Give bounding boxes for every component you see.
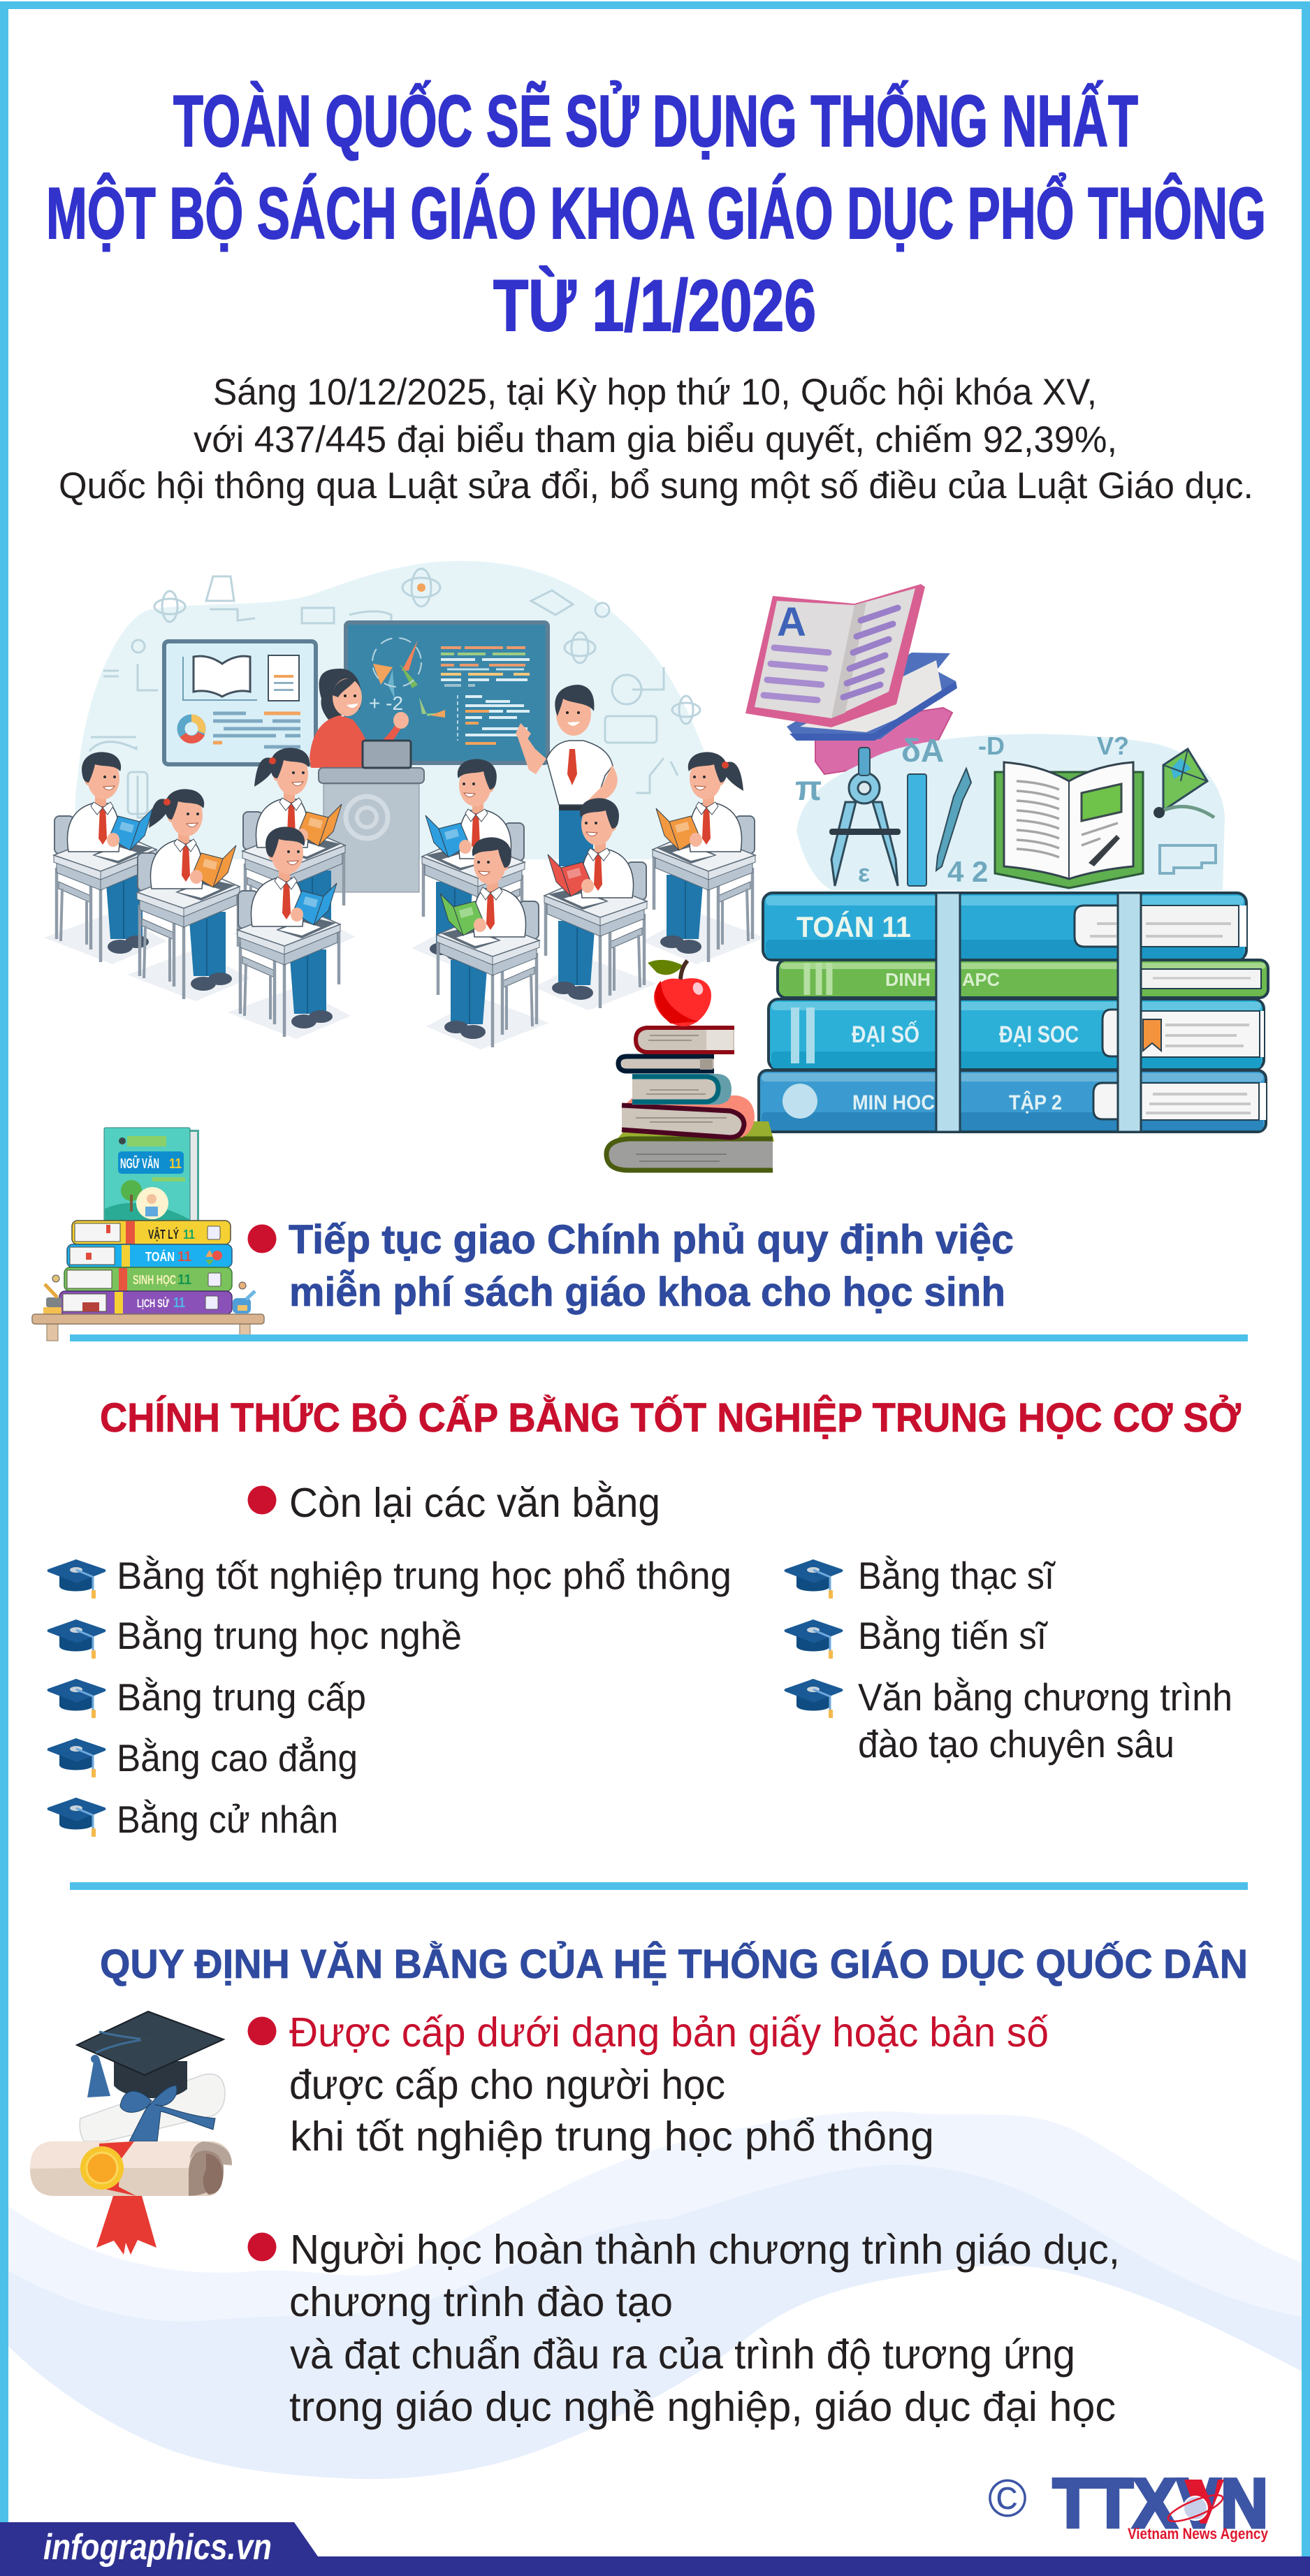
- book: Đại số: ĐẠI SỐ: [852, 1021, 919, 1048]
- teacher: man: [516, 685, 618, 866]
- item: specialised training: Văn bằng chương trình: [858, 1675, 1232, 1719]
- website: infographics.vn: [43, 2527, 272, 2568]
- book: Toán 11 small: 11: [177, 1249, 191, 1265]
- completion requirement text: trong giáo dục nghề nghiệp, giáo dục đại học: [289, 2384, 1116, 2430]
- doodle note: [1160, 845, 1216, 873]
- math symbols: 4 2: [947, 855, 988, 888]
- math symbols: ε: [858, 859, 870, 887]
- illustration: classroom: [44, 561, 765, 1049]
- completion requirement text: Người học hoàn thành chương trình giáo dục,: [290, 2227, 1120, 2273]
- student: front right boy: [426, 837, 549, 1049]
- completion requirement text: và đạt chuẩn đầu ra của trình độ tương ứng: [290, 2331, 1075, 2378]
- section: free textbooks: [247, 1217, 1014, 1315]
- student: back right boy: [412, 759, 534, 971]
- screen: textbook and chart: [164, 641, 316, 764]
- apple: [648, 960, 711, 1026]
- item: upper secondary: Bằng tốt nghiệp trung học phổ thông: [117, 1554, 732, 1597]
- book: Sinh học 11: [64, 1267, 232, 1291]
- book: Sinh học 11: 11: [177, 1272, 191, 1288]
- tools background: [796, 734, 1225, 890]
- item: specialised training: đào tạo chuyên sâu: [858, 1722, 1174, 1766]
- paint brush: [936, 769, 971, 871]
- book: green: APC: [962, 969, 1000, 990]
- free textbooks text: Tiếp tục giao Chính phủ quy định việc: [289, 1217, 1014, 1262]
- book: Vật lý 11: VẬT LÝ: [148, 1227, 179, 1242]
- book: Đại số: [769, 999, 1264, 1070]
- book: Lịch sử 11: 11: [173, 1295, 185, 1311]
- item: master: Bằng thạc sĩ: [858, 1554, 1056, 1597]
- background waves: [8, 2111, 1302, 2479]
- book: navy: [618, 1056, 714, 1071]
- book: green: DINH: [885, 969, 931, 990]
- item: doctor: Bằng tiến sĩ: [858, 1614, 1049, 1657]
- item: college: Bằng cao đẳng: [117, 1736, 358, 1780]
- bullet: [247, 1224, 277, 1253]
- heading: national education diplomas: QUY ĐỊNH VĂN BẰNG CỦA HỆ THỐNG GIÁO DỤC QUỐC DÂN: [100, 1942, 1248, 1987]
- student: back left girl: [233, 748, 356, 960]
- issuing format text: Được cấp dưới dạng bản giấy hoặc bản số: [289, 2009, 1049, 2055]
- math symbols: π: [795, 769, 822, 808]
- divider: [70, 1882, 1248, 1890]
- student: second row left girl: [127, 789, 250, 1001]
- book: red: [636, 1028, 734, 1052]
- bullet: [247, 2233, 277, 2261]
- section: completion requirement: [247, 2227, 1120, 2430]
- completion requirement text: [289, 2227, 1120, 2430]
- book: Ngữ Văn 11: 11: [169, 1156, 182, 1172]
- kite: [1153, 749, 1214, 818]
- ruler: [908, 774, 926, 886]
- shelf: [32, 1314, 264, 1341]
- heading: abolish lower secondary diploma: CHÍNH THỨC BỎ CẤP BẰNG TỐT NGHIỆP TRUNG HỌC CƠ SỞ: [100, 1395, 1241, 1441]
- remaining diplomas label: Còn lại các văn bằng: [289, 1480, 660, 1526]
- book: teal: [632, 1074, 732, 1105]
- red ribbon top: [99, 2141, 136, 2196]
- student: second row right boy: [534, 798, 657, 1010]
- section: issuing format: [247, 2009, 1049, 2160]
- book: green: [778, 960, 1268, 998]
- math symbols: -D: [978, 732, 1005, 760]
- teacher: woman: [310, 669, 409, 768]
- classroom background blob: [75, 561, 713, 859]
- book: Lịch sử 11: LỊCH SỬ: [137, 1297, 170, 1310]
- screen: data chalkboard: + -2: [369, 692, 403, 714]
- book: Toán 11: [763, 893, 1246, 960]
- book: Sinh học 11: SINH HỌC: [133, 1273, 176, 1287]
- parchment roll: [30, 2141, 232, 2196]
- item: vocational secondary: Bằng trung học nghề: [117, 1614, 462, 1657]
- divider: [70, 1334, 1248, 1341]
- illustration: large book stack: [759, 893, 1268, 1132]
- book: olive: [606, 1121, 774, 1170]
- item: doctor: [784, 1614, 1049, 1659]
- illustration: apple on small book stack: [606, 960, 774, 1170]
- compass: [829, 748, 901, 886]
- item: intermediate: Bằng trung cấp: [117, 1675, 366, 1719]
- title: [46, 80, 1266, 347]
- item: master: [784, 1554, 1056, 1599]
- red ribbon: [96, 2141, 157, 2255]
- illustration: mortarboard and diploma: [30, 2011, 232, 2255]
- completion requirement text: chương trình đào tạo: [289, 2279, 673, 2325]
- title: TỪ 1/1/2026: [493, 265, 816, 347]
- copyright mark: ©: [988, 2469, 1027, 2528]
- student: right girl: [642, 752, 765, 964]
- open book: [995, 762, 1143, 888]
- student: left boy: [44, 752, 167, 964]
- mortarboard: [77, 2011, 224, 2098]
- strap right: [1118, 893, 1141, 1132]
- book: Toán 11 small: TOÁN: [145, 1249, 175, 1264]
- book: Toán 11: TOÁN 11: [796, 910, 911, 943]
- science doodles: [89, 569, 700, 817]
- book: Ngữ Văn 11: [104, 1128, 199, 1221]
- blue bow: [120, 2086, 215, 2141]
- item: specialised training: [784, 1675, 1232, 1766]
- TTXVN logo: TTXVN: [1053, 2464, 1268, 2542]
- book: Tập 2: TẬP 2: [1009, 1091, 1062, 1114]
- TTXVN logo: Vietnam News Agency: [1128, 2525, 1269, 2542]
- diploma list: left column: [48, 1554, 732, 1841]
- issuing format text: được cấp cho người học: [289, 2062, 725, 2108]
- book: Lịch sử 11: [59, 1291, 232, 1314]
- book: Vật lý 11: 11: [183, 1228, 195, 1242]
- free textbooks text: [289, 1217, 1014, 1315]
- book: Tập 2: MIN HOC: [852, 1091, 935, 1114]
- diploma list: right column: [784, 1554, 1232, 1766]
- white scroll: [80, 2074, 225, 2141]
- book: Ngữ Văn 11: NGỮ VĂN: [120, 1155, 159, 1172]
- student: front left boy: [228, 827, 351, 1039]
- intro paragraph: với 437/445 đại biểu tham gia biểu quyết, chiếm 92,39%,: [194, 419, 1117, 460]
- math symbols: V?: [1097, 732, 1129, 760]
- illustration: floating books: A: [777, 599, 806, 645]
- book: Tập 2: [759, 1070, 1266, 1132]
- item: bachelor: Bằng cử nhân: [117, 1798, 338, 1841]
- math symbols: δA: [901, 732, 944, 769]
- bullet: [247, 2016, 277, 2046]
- school items: [43, 1275, 255, 1314]
- math symbols: [795, 732, 1129, 888]
- podium with monitor: [319, 741, 424, 892]
- screen: data chalkboard: [346, 623, 548, 763]
- intro paragraph: Quốc hội thông qua Luật sửa đổi, bổ sung một số điều của Luật Giáo dục.: [59, 465, 1253, 507]
- book: Toán 11 small: [67, 1244, 232, 1267]
- issuing format text: [289, 2009, 1049, 2160]
- strap left: [936, 893, 960, 1132]
- illustration: school tools: [795, 732, 1225, 890]
- intro paragraph: [59, 372, 1253, 507]
- illustration: textbooks on shelf: [32, 1128, 264, 1341]
- book: Đại số: ĐẠI SOC: [999, 1021, 1079, 1048]
- gold seal: [80, 2146, 124, 2190]
- book: maroon: [622, 1095, 755, 1137]
- footer bar: [0, 2522, 1310, 2576]
- intro paragraph: Sáng 10/12/2025, tại Kỳ họp thứ 10, Quốc hội khóa XV,: [213, 372, 1097, 413]
- book: Vật lý 11: [72, 1221, 231, 1244]
- issuing format text: khi tốt nghiệp trung học phổ thông: [290, 2113, 934, 2160]
- free textbooks text: miễn phí sách giáo khoa cho học sinh: [289, 1269, 1005, 1315]
- illustration: floating books: [745, 584, 957, 774]
